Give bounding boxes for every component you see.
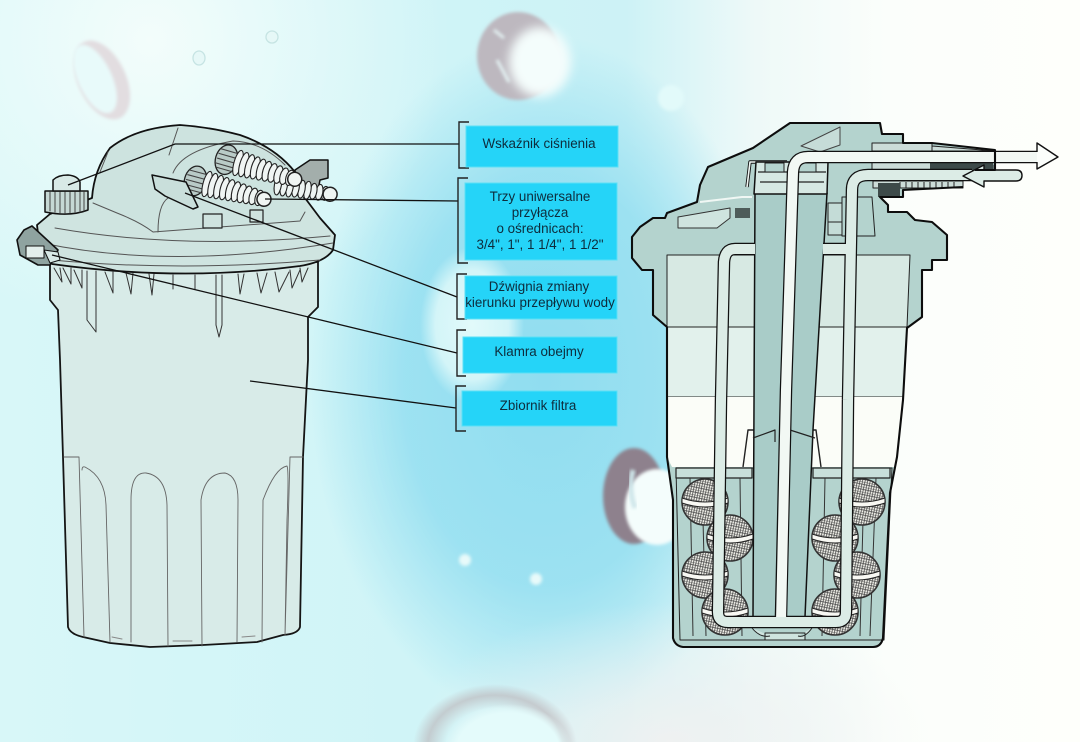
label: flow direction lever — [465, 276, 617, 319]
label: filter tank — [462, 391, 617, 426]
label: flow direction lever: kierunku przepływu wody — [465, 295, 615, 310]
housing outline — [632, 123, 995, 647]
flow lever — [152, 175, 198, 209]
hose connector: top — [212, 142, 306, 196]
droplet: bottom centre — [410, 680, 580, 742]
bottom basket — [676, 430, 892, 640]
foam layer bottom — [667, 397, 903, 467]
lid interior — [678, 127, 995, 236]
droplet: lower centre — [603, 448, 689, 545]
hose connector: rear right — [273, 175, 339, 205]
label: universal connectors: przyłącza — [512, 205, 569, 220]
inlet arrow — [963, 165, 1022, 187]
label: universal connectors: Trzy uniwersalne — [490, 189, 590, 204]
foam layer top — [667, 255, 910, 327]
label: pressure gauge: Wskaźnik ciśnienia — [482, 136, 596, 151]
lid feet — [203, 210, 263, 228]
central column — [753, 162, 828, 617]
label: clamp — [463, 337, 617, 373]
bottom drain — [752, 628, 812, 640]
housing fill — [632, 123, 995, 647]
label: filter tank: Zbiornik filtra — [500, 398, 577, 413]
pressure gauge — [45, 175, 88, 214]
rear lug — [295, 160, 328, 195]
droplet: top centre — [477, 12, 571, 100]
lid rim — [37, 198, 335, 274]
lid dome — [92, 125, 307, 232]
hose connector: front — [181, 164, 275, 216]
clamp — [17, 226, 60, 265]
leader lines — [52, 144, 459, 408]
label: universal connectors — [465, 183, 617, 260]
tank ribs — [54, 268, 308, 337]
label: clamp: Klamra obejmy — [494, 344, 584, 359]
droplets: small bubbles top — [193, 31, 684, 111]
droplets: small bubbles lower — [459, 554, 542, 585]
droplet: top left — [62, 32, 142, 128]
brackets — [456, 122, 469, 431]
filter balls — [682, 479, 885, 635]
label: universal connectors: o ośrednicach: — [496, 221, 584, 236]
dome outline — [92, 125, 295, 198]
foam layer middle — [667, 327, 907, 397]
right filter cross-section — [632, 123, 1058, 647]
label: flow direction lever: Dźwignia zmiany — [489, 279, 590, 294]
water pipes — [718, 157, 1038, 622]
tank — [50, 262, 318, 647]
rim and dome detail lines — [42, 128, 333, 266]
outlet arrow — [1037, 143, 1058, 169]
label: pressure gauge — [466, 126, 618, 167]
left filter illustration — [17, 125, 339, 647]
label: universal connectors: 3/4", 1", 1 1/4", 1 1/2" — [477, 237, 604, 252]
